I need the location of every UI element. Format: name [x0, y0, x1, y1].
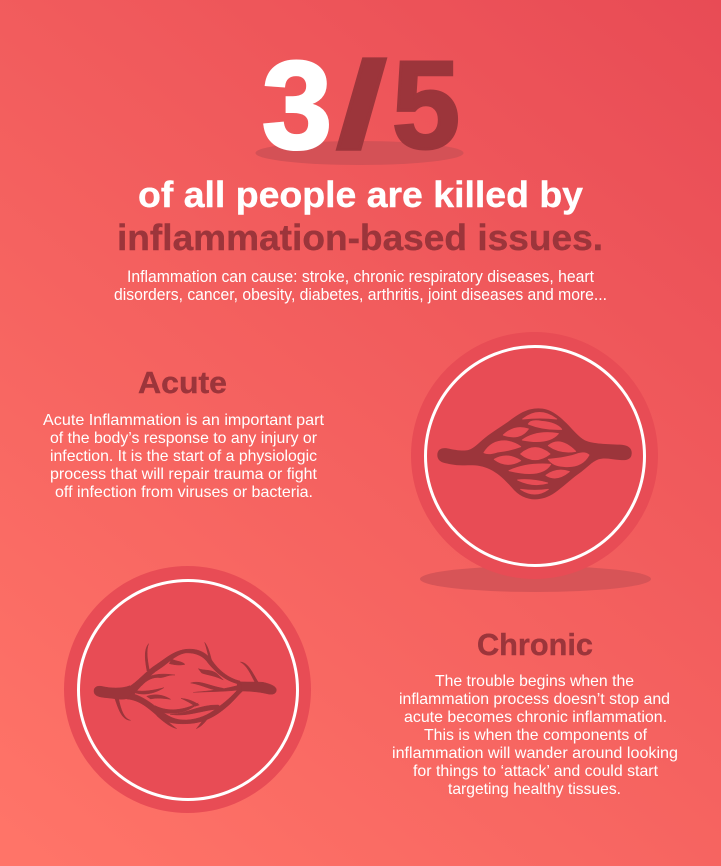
acute description: of the body’s response to any injury or — [50, 430, 318, 447]
acute description: Acute Inflammation is an important part — [43, 412, 325, 429]
chronic description: targeting healthy tissues. — [448, 781, 621, 798]
swollen tissue — [437, 408, 632, 499]
intro text — [114, 267, 607, 304]
chronic description: for things to ‘attack’ and could start — [413, 763, 659, 780]
acute description: off infection from viruses or bacteria. — [55, 484, 313, 501]
acute description — [43, 412, 325, 501]
icon: acute inflammation circle — [411, 332, 658, 579]
chronic description: inflammation process doesn’t stop and — [399, 691, 670, 708]
acute description: process that will repair trauma or fight — [50, 466, 318, 483]
acute description: infection. It is the start of a physiologic — [50, 448, 317, 465]
numeral 5: 5 — [392, 37, 460, 175]
chronic description: This is when the components of — [424, 727, 648, 744]
intro text: disorders, cancer, obesity, diabetes, arthritis, joint diseases and more... — [114, 285, 607, 304]
shadow under statistic — [256, 141, 464, 165]
statistic: 3/5 with shadow — [256, 37, 464, 175]
intro text: Inflammation can cause: stroke, chronic respiratory diseases, heart — [127, 267, 594, 286]
icon: chronic inflammation circle — [64, 566, 311, 813]
chronic description: The trouble begins when the — [435, 673, 634, 690]
chronic description: acute becomes chronic inflammation. — [404, 709, 667, 726]
heading: Chronic: Chronic — [477, 627, 593, 662]
heading line: of all people are killed by: of all people are killed by — [138, 174, 583, 215]
branching veins — [94, 642, 276, 729]
slash: / — [336, 37, 387, 173]
numeral 3: 3 — [262, 37, 332, 175]
shadow under acute circle — [420, 566, 651, 592]
chronic description: inflammation will wander around looking — [392, 745, 678, 762]
chronic description — [392, 673, 678, 798]
heading: Acute: Acute — [138, 365, 227, 400]
heading line: inflammation-based issues: inflammation-based issues. — [117, 217, 603, 258]
